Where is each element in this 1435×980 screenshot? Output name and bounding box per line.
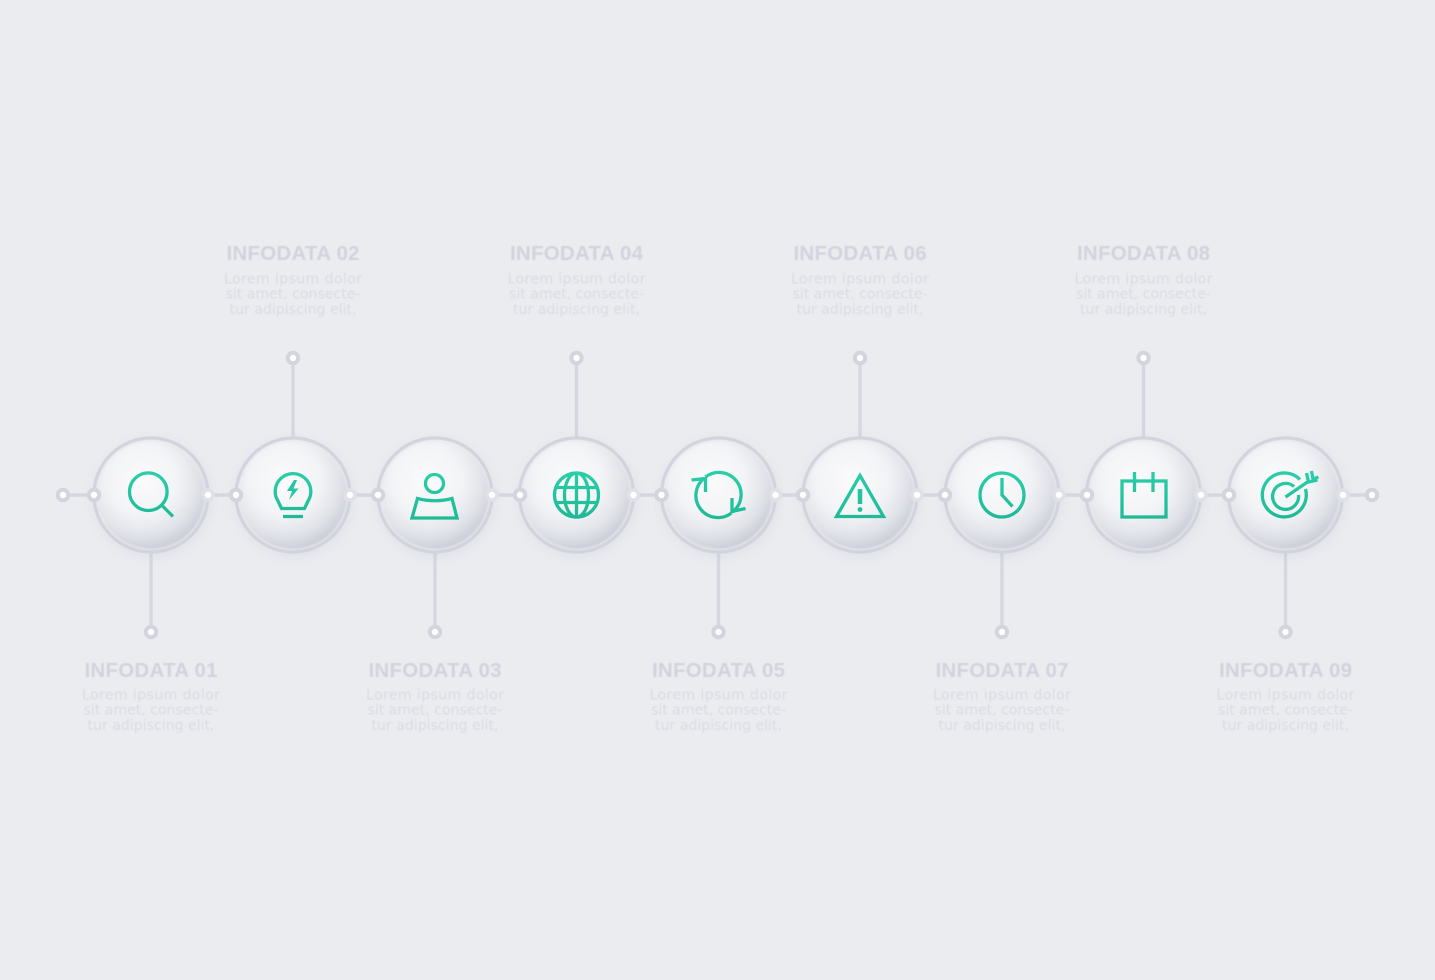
icon: refresh arrows [692,472,746,518]
icon: target with arrow [1262,471,1318,517]
icon: warning triangle [836,476,884,516]
icon: person on map [412,474,457,518]
label 03: tur adipiscing elit, [372,718,498,734]
label 01: Lorem ipsum dolor [82,688,220,704]
label 02: sit amet, consecte- [226,286,360,302]
label 05: tur adipiscing elit, [655,718,782,734]
step 06 [791,242,929,552]
label 04: tur adipiscing elit, [513,302,640,318]
step 05 [650,438,788,734]
label 09: sit amet, consecte- [1218,702,1353,718]
label 06: tur adipiscing elit, [796,302,924,318]
icon: globe [554,473,598,517]
label 07 [933,659,1071,734]
label 07: INFODATA 07 [936,659,1068,682]
label 05: sit amet, consecte- [651,702,786,718]
label 02: INFODATA 02 [226,242,360,265]
label 01: tur adipiscing elit, [88,718,214,734]
icon: calendar [1122,472,1166,517]
label 09: tur adipiscing elit, [1222,718,1349,734]
step 02 [224,242,362,552]
label 03: Lorem ipsum dolor [366,688,504,704]
label 08: sit amet, consecte- [1076,286,1211,302]
label 01: INFODATA 01 [84,659,218,682]
label 03: INFODATA 03 [368,659,502,682]
label 06: sit amet, consecte- [792,286,928,302]
label 05: Lorem ipsum dolor [650,688,788,704]
label 06: INFODATA 06 [794,242,926,265]
label 09 [1216,659,1355,734]
start node [58,490,68,500]
step 08 [1074,242,1213,552]
label 08: INFODATA 08 [1077,242,1210,265]
label 05 [650,659,788,734]
label 07: Lorem ipsum dolor [933,688,1071,704]
step 04 [508,242,646,552]
label 03 [366,659,504,734]
label 09: Lorem ipsum dolor [1216,688,1355,704]
label 01 [82,659,220,734]
step 03 [366,438,504,734]
end node [1367,490,1377,500]
label 05: INFODATA 05 [652,659,785,682]
label 06 [791,242,929,318]
icon: magnifier [130,473,173,516]
step 07 [933,438,1071,734]
label 06: Lorem ipsum dolor [791,272,929,288]
timeline connectors [63,493,1372,497]
label 02: Lorem ipsum dolor [224,272,362,288]
label 08 [1074,242,1213,318]
step 01 [82,438,220,734]
label 01: sit amet, consecte- [84,702,218,718]
icon: clock [980,473,1024,517]
label 08: tur adipiscing elit, [1080,302,1207,318]
label 07: sit amet, consecte- [934,702,1070,718]
label 08: Lorem ipsum dolor [1074,272,1213,288]
step 09 [1216,438,1355,734]
label 03: sit amet, consecte- [368,702,502,718]
label 07: tur adipiscing elit, [938,718,1066,734]
label 04: sit amet, consecte- [509,286,644,302]
label 02: tur adipiscing elit, [230,302,356,318]
label 04 [508,242,646,318]
label 09: INFODATA 09 [1219,659,1352,682]
label 02 [224,242,362,318]
label 04: INFODATA 04 [510,242,644,265]
label 04: Lorem ipsum dolor [508,272,646,288]
icon: light bulb [275,474,311,516]
